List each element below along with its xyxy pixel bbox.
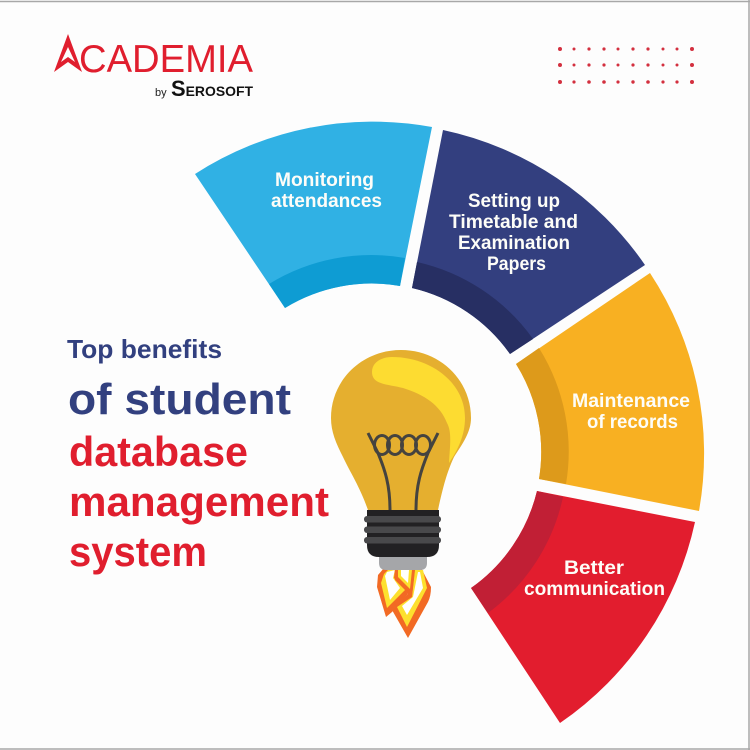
label: Timetable and [449,212,578,233]
flames [377,566,431,638]
Serosoft wordmark: SEROSOFT [171,76,253,101]
label: Examination [458,233,570,254]
bulb highlight [372,357,465,463]
panel: monitoring attendances [195,122,432,308]
red segment [471,491,695,723]
label: Better [564,558,625,579]
base rings [364,516,441,544]
label: communication [524,579,665,600]
title block [67,334,329,575]
blue inner band [269,255,405,308]
heading line: system: system [69,528,207,575]
navy segment [412,130,645,354]
label [271,170,382,212]
blue segment [195,122,432,308]
dot grid decoration [558,47,694,84]
navy inner band [412,262,533,354]
logo: Academia by Serosoft [54,34,253,101]
label [572,391,690,433]
label: Monitoring [275,170,374,191]
center flame [394,568,415,596]
heading line: top benefits: Top benefits [67,334,222,364]
orange segment [516,273,704,511]
orange inner band [516,348,569,484]
icon: Academia A mark [54,34,82,72]
byline: by [155,87,167,99]
label: attendances [271,191,382,212]
panel: better communication [471,491,695,723]
gray contact [379,555,427,570]
panel: timetable and examination papers [412,130,645,354]
panel: maintenance of records [516,273,704,511]
label: of records [587,412,678,433]
icon: light bulb rocket [331,350,471,638]
heading line: management: management [69,478,329,525]
label [524,558,665,600]
label: Setting up [468,191,560,212]
left flame [377,568,408,617]
filament [368,433,438,510]
red inner band [471,491,563,613]
right flame [388,566,431,638]
heading line: of student: of student [68,375,291,424]
screw base [367,510,439,557]
wordmark: CADEMIA [79,38,253,81]
label: Papers [487,254,546,275]
heading line: database: database [69,428,248,475]
bulb glass [331,350,471,510]
label: Maintenance [572,391,690,412]
label [449,191,578,275]
